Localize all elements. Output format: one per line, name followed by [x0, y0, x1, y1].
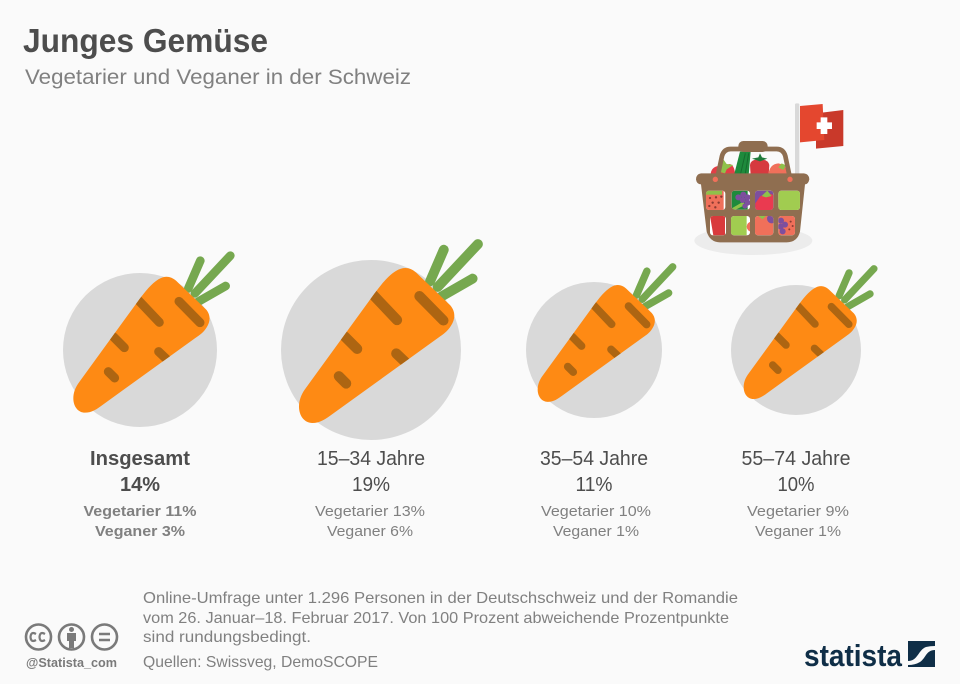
label: 15–34 Jahre: 15–34 Jahre [317, 448, 425, 470]
panel: Insgesamt [63, 256, 230, 540]
label: 35–54 Jahre [540, 448, 651, 540]
label: 15–34 Jahre: Vegetarier 13% [315, 503, 425, 520]
label: Insgesamt [84, 448, 196, 540]
label: 35–54 Jahre: Veganer 1% [553, 523, 639, 540]
label: 15–34 Jahre: 19% [352, 474, 390, 496]
footnote text: vom 26. Januar–18. Februar 2017. Von 100 Prozent abweichende Prozentpunkte [143, 610, 729, 627]
label: Insgesamt: Vegetarier 11% [84, 503, 196, 520]
icon: creative commons licence [26, 624, 117, 650]
label: 55–74 Jahre [742, 448, 850, 540]
footnote text: sind rundungsbedingt. [143, 629, 311, 646]
logo mark [908, 641, 935, 667]
basket handle [718, 149, 789, 175]
label: 15–34 Jahre [315, 448, 425, 540]
icon: carrot 55–74 Jahre [744, 269, 874, 399]
title: Junges Gemüse [23, 22, 268, 59]
strawberry window [706, 191, 724, 210]
tomato window [755, 216, 774, 236]
label: 55–74 Jahre: Vegetarier 9% [747, 503, 849, 520]
circle: 55–74 Jahre [731, 285, 861, 415]
label: 55–74 Jahre: 55–74 Jahre [742, 448, 850, 470]
icon: carrot Insgesamt [73, 256, 230, 413]
label: 35–54 Jahre: Vegetarier 10% [541, 503, 651, 520]
basket shadow [694, 226, 812, 255]
purple and red window [755, 191, 773, 210]
subtitle: Vegetarier und Veganer in der Schweiz [25, 66, 411, 89]
basket body [696, 173, 809, 242]
label: 15–34 Jahre: Veganer 6% [327, 523, 413, 540]
label: 35–54 Jahre: 11% [576, 474, 613, 496]
logo: statista: statista [804, 638, 903, 673]
circle: 15–34 Jahre [281, 260, 461, 440]
label: 35–54 Jahre: 35–54 Jahre [540, 448, 648, 470]
footnote text: Online-Umfrage unter 1.296 Personen in der Deutschschweiz und der Romandie [143, 590, 738, 607]
handle grip [738, 141, 768, 152]
circle: Insgesamt [63, 273, 217, 427]
fruit above basket [711, 152, 788, 175]
icon: carrot 15–34 Jahre [299, 244, 478, 423]
Swiss flag [800, 104, 843, 149]
lime window 2 [731, 216, 750, 236]
panel: 35–54 Jahre [526, 267, 673, 540]
grapes and strawberry window [778, 216, 795, 235]
panel: 15–34 Jahre [281, 244, 478, 540]
label: 55–74 Jahre: 10% [778, 474, 815, 496]
flag pole [795, 103, 799, 175]
red fruit window [710, 216, 725, 235]
grapes window [732, 191, 751, 210]
illustration: shopping basket with Swiss flag [694, 103, 843, 255]
credit handle: @Statista_com [26, 656, 117, 670]
label: Insgesamt: 14% [120, 474, 160, 496]
basket windows with fruit [706, 190, 800, 236]
lime window [778, 191, 800, 210]
rim studs [713, 177, 793, 182]
source line: Quellen: Swissveg, DemoSCOPE [143, 654, 378, 671]
label: Insgesamt: Insgesamt [90, 448, 190, 470]
circle: 35–54 Jahre [526, 282, 662, 418]
label: Insgesamt: Veganer 3% [95, 523, 185, 540]
panel: 55–74 Jahre [731, 269, 874, 540]
icon: carrot 35–54 Jahre [538, 267, 673, 402]
footnote text [143, 590, 738, 646]
label: 55–74 Jahre: Veganer 1% [755, 523, 841, 540]
